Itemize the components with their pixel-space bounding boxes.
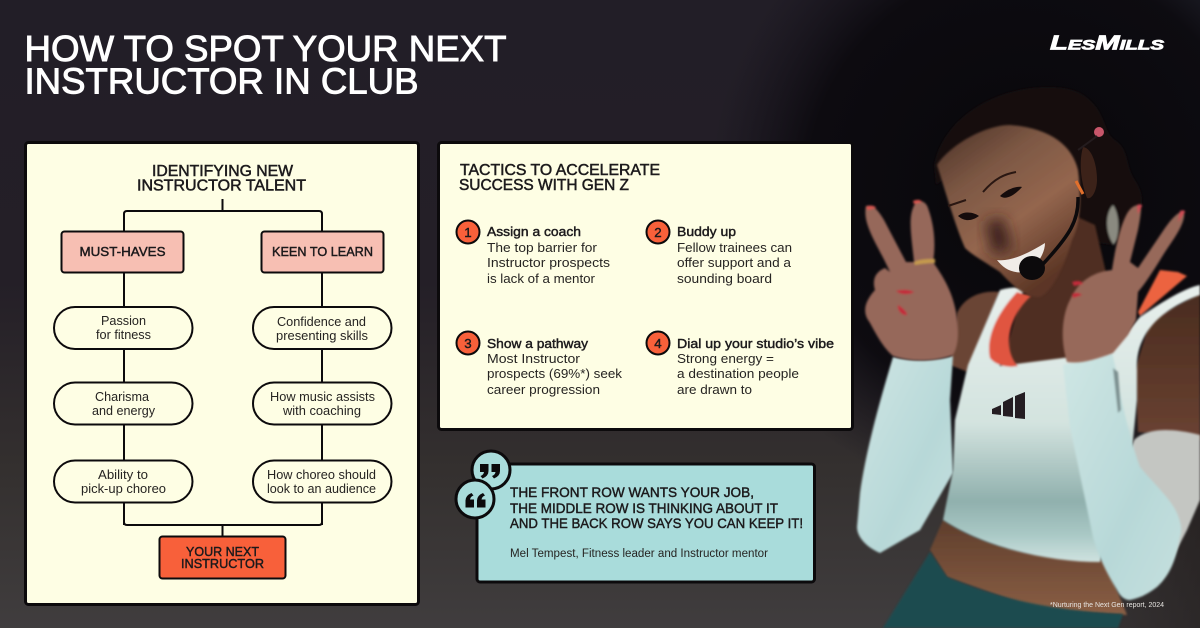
- left hand: [865, 200, 958, 360]
- pill: charisma and energy: and energy: [92, 403, 155, 418]
- pill: how choreo should look to an audience: look to an audience: [267, 481, 376, 496]
- tactic 2: [646, 220, 792, 286]
- smile: [997, 243, 1045, 272]
- quote text: [510, 484, 803, 531]
- icon: opening quote mark: [456, 480, 494, 518]
- ear: [1081, 147, 1097, 198]
- tactic 1: Assign a coach: [487, 224, 581, 239]
- pill: ability to pick-up choreo: Ability to: [98, 467, 148, 482]
- box: must-haves: MUST-HAVES: [80, 244, 166, 259]
- panel heading: TACTICS TO ACCELERATE: [460, 162, 660, 179]
- right upper arm: [1135, 293, 1200, 440]
- tactic 2: 2: [654, 225, 662, 240]
- tactic 3: prospects (69%*) seek: [487, 366, 622, 381]
- headset: [1019, 136, 1097, 280]
- box: your next instructor: YOUR NEXT: [186, 544, 259, 559]
- pill: how choreo should look to an audience: [253, 460, 392, 502]
- quote text: THE MIDDLE ROW IS THINKING ABOUT IT: [510, 500, 778, 516]
- midriff: [930, 520, 1127, 615]
- nose shadow: [985, 218, 1012, 254]
- icon: closing quote mark: [472, 451, 510, 489]
- pill: confidence and presenting skills: [253, 307, 392, 349]
- footnote: *Nurturing the Next Gen report, 2024: [1050, 600, 1164, 609]
- tactic 1: Instructor prospects: [487, 255, 610, 270]
- panel heading: IDENTIFYING NEW: [152, 163, 293, 180]
- panel: identifying new instructor talent: [26, 142, 418, 604]
- tactic 3: [456, 332, 622, 397]
- panel: quote: [456, 451, 814, 582]
- pill: confidence and presenting skills: Confidence and: [277, 314, 366, 329]
- box: your next instructor: [160, 536, 286, 578]
- pill: how music assists with coaching: How music assists: [270, 389, 375, 404]
- pill: passion for fitness: [54, 307, 192, 349]
- quote attribution: Mel Tempest, Fitness leader and Instructor mentor: [510, 548, 768, 560]
- tactic 2: Fellow trainees can: [677, 240, 792, 255]
- panel heading: [137, 163, 307, 194]
- logo: Les Mills: LesMills: [1050, 32, 1165, 54]
- quote text: AND THE BACK ROW SAYS YOU CAN KEEP IT!: [510, 515, 803, 531]
- pill: how music assists with coaching: with coaching: [282, 403, 361, 418]
- left shoulder: [950, 292, 1000, 372]
- pill: how choreo should look to an audience: How choreo should: [267, 467, 376, 482]
- tactic 4: a destination people: [677, 366, 799, 381]
- right hand: [1063, 204, 1185, 363]
- title: [24, 28, 507, 102]
- quote text: THE FRONT ROW WANTS YOUR JOB,: [510, 484, 754, 500]
- face: [937, 125, 1080, 297]
- earring: [1076, 181, 1083, 194]
- pill: ability to pick-up choreo: pick-up choreo: [81, 481, 166, 496]
- panel: tactics to accelerate success: [438, 142, 852, 430]
- right sleeve: [1063, 353, 1181, 600]
- pill: charisma and energy: Charisma: [95, 389, 150, 404]
- box: keen to learn: [262, 232, 384, 272]
- tactic 1: The top barrier for: [487, 240, 598, 255]
- panel heading: [459, 162, 660, 194]
- photo: instructor with peace signs: [857, 87, 1200, 628]
- hair tie: [1094, 127, 1104, 137]
- pill: charisma and energy: [54, 382, 192, 424]
- title: HOW TO SPOT YOUR NEXT: [24, 28, 507, 69]
- tactic 3: Most Instructor: [487, 351, 581, 366]
- pill: passion for fitness: for fitness: [96, 327, 151, 342]
- panel heading: SUCCESS WITH GEN Z: [459, 177, 629, 194]
- title: INSTRUCTOR IN CLUB: [24, 60, 418, 102]
- tactic 1: [456, 220, 610, 286]
- box: keen to learn: KEEN TO LEARN: [272, 244, 373, 259]
- tactic 3: Show a pathway: [487, 336, 588, 351]
- pill: ability to pick-up choreo: [54, 460, 192, 502]
- pill: confidence and presenting skills: presenting skills: [276, 328, 368, 343]
- left sleeve: [857, 356, 953, 553]
- tactic 2: Buddy up: [677, 224, 736, 239]
- tactic 2: offer support and a: [677, 255, 792, 270]
- pill: how music assists with coaching: [253, 382, 392, 424]
- right upper sleeve: [1120, 430, 1200, 582]
- tactic 3: career progression: [487, 382, 600, 397]
- neck and chest: [1000, 210, 1125, 390]
- tactic 4: are drawn to: [677, 382, 752, 397]
- tactic 4: Dial up your studio’s vibe: [677, 336, 834, 351]
- pill: passion for fitness: Passion: [101, 313, 146, 328]
- tactic 4: Strong energy =: [677, 351, 774, 366]
- eyes and brows: [948, 172, 1022, 220]
- box: your next instructor: INSTRUCTOR: [181, 556, 264, 571]
- flow connectors: [124, 199, 322, 536]
- tactic 2: sounding board: [677, 271, 772, 286]
- tactic 4: [646, 332, 834, 397]
- box: must-haves: [62, 232, 184, 272]
- shorts: [883, 552, 1123, 628]
- panel heading: INSTRUCTOR TALENT: [137, 178, 307, 194]
- tactic 3: 3: [464, 336, 472, 351]
- tactic 1: is lack of a mentor: [487, 271, 596, 286]
- crop top: [943, 270, 1200, 562]
- tactic 4: 4: [654, 336, 662, 351]
- hair: [934, 87, 1142, 245]
- tactic 1: 1: [464, 225, 472, 240]
- top brand mark: [992, 392, 1025, 419]
